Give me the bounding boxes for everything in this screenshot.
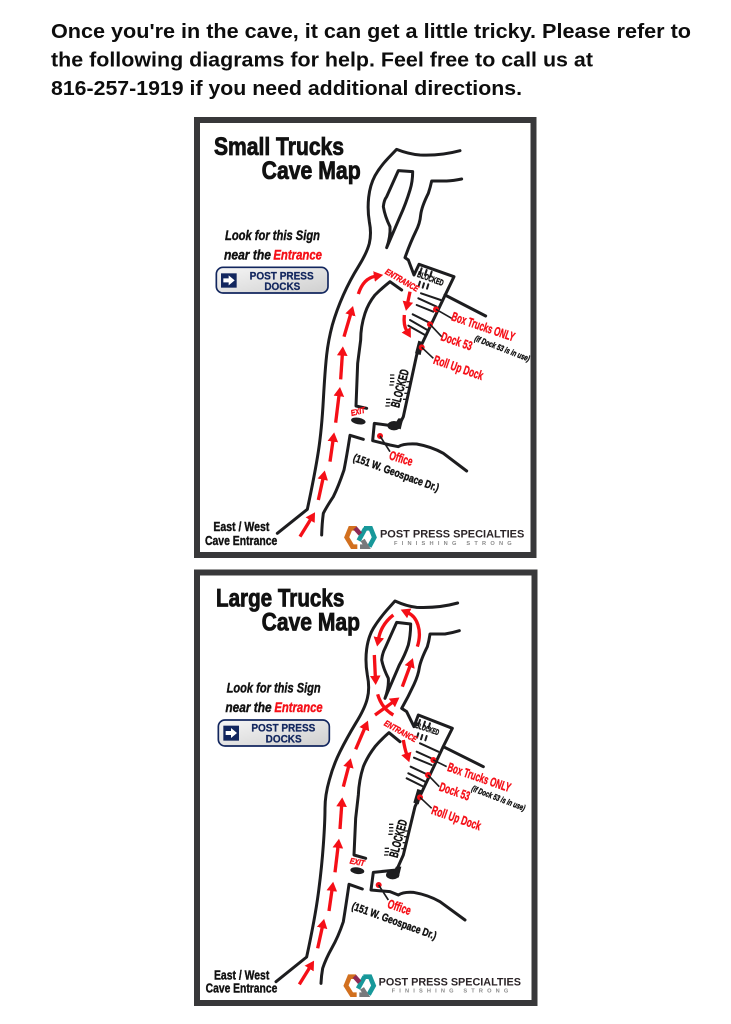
sign instruction: near the bbox=[225, 699, 272, 715]
location markers bbox=[377, 306, 452, 452]
map labels: East / West bbox=[213, 519, 270, 534]
logo: post press specialties: POST PRESS SPECIALTIES bbox=[380, 528, 525, 540]
logo: post press specialties: FINISHING STRONG bbox=[394, 541, 512, 547]
blocked route x stroke bbox=[378, 694, 393, 715]
sign instruction: Entrance bbox=[274, 699, 323, 715]
route arrows bbox=[300, 276, 410, 537]
logo: post press specialties bbox=[346, 976, 521, 995]
sign: post press docks bbox=[216, 267, 328, 293]
map labels: ENTRANCE bbox=[382, 718, 419, 744]
logo: post press specialties bbox=[347, 528, 525, 547]
heading: directions intro bbox=[51, 21, 691, 100]
location markers bbox=[376, 757, 447, 900]
map drawing bbox=[205, 133, 531, 548]
heading: directions intro: the following diagrams for help. Feel free to call us at bbox=[51, 50, 593, 72]
sign: post press docks: POST PRESS bbox=[251, 723, 315, 735]
map labels: BLOCKED bbox=[414, 721, 440, 737]
map title bbox=[216, 585, 360, 637]
map labels: Cave Entrance bbox=[205, 533, 277, 548]
sign: post press docks bbox=[218, 720, 329, 746]
map labels: (if Dock 53 is in use) bbox=[470, 783, 527, 813]
sign: post press docks: DOCKS bbox=[264, 281, 300, 293]
map labels: (if Dock 53 is in use) bbox=[473, 333, 531, 363]
map labels: (151 W. Geospace Dr.) bbox=[351, 452, 441, 495]
sign instruction: Look for this Sign bbox=[225, 227, 320, 243]
map labels: ENTRANCE bbox=[383, 266, 421, 294]
logo: post press specialties: POST PRESS SPECIALTIES bbox=[379, 977, 521, 989]
map title: Small Trucks bbox=[214, 133, 344, 161]
heading: directions intro: Once you're in the cave, it can get a little tricky. Please refer to bbox=[51, 21, 691, 43]
map labels: Roll Up Dock bbox=[432, 353, 486, 383]
map labels: BLOCKED bbox=[416, 269, 445, 288]
map labels: Office bbox=[387, 448, 414, 469]
roll up dock and office blocks bbox=[350, 789, 423, 879]
panel frame bbox=[197, 120, 534, 555]
map labels: BLOCKED bbox=[387, 818, 410, 859]
map labels: Roll Up Dock bbox=[430, 803, 483, 833]
map title: Cave Map bbox=[262, 157, 361, 185]
panel: large trucks cave map bbox=[197, 572, 534, 1003]
sign instruction: Look for this Sign bbox=[227, 679, 321, 695]
route arrows bbox=[299, 613, 419, 984]
map labels: EXIT bbox=[350, 405, 367, 418]
map labels bbox=[206, 718, 527, 996]
sign instruction bbox=[224, 227, 322, 263]
map labels: Box Trucks ONLY bbox=[450, 310, 517, 344]
map labels: Dock 53 bbox=[439, 330, 474, 353]
panel frame bbox=[197, 572, 534, 1003]
roll up dock and office blocks bbox=[351, 341, 423, 430]
map labels bbox=[205, 266, 531, 548]
map labels: Office bbox=[386, 897, 413, 918]
map labels: East / West bbox=[214, 967, 270, 982]
cave walls bbox=[276, 601, 483, 983]
sign instruction bbox=[225, 679, 323, 715]
logo: post press specialties: FINISHING STRONG bbox=[392, 989, 509, 995]
map drawing bbox=[206, 585, 527, 996]
map labels: Box Trucks ONLY bbox=[446, 760, 513, 795]
sign: post press docks: POST PRESS bbox=[250, 270, 314, 282]
map labels: BLOCKED bbox=[388, 368, 412, 409]
panel: small trucks cave map bbox=[197, 120, 534, 555]
map labels: Cave Entrance bbox=[206, 981, 277, 996]
heading: directions intro: 816-257-1919 if you need additional directions. bbox=[51, 78, 522, 100]
sign instruction: Entrance bbox=[273, 247, 322, 263]
map labels: (151 W. Geospace Dr.) bbox=[350, 901, 438, 942]
sign instruction: near the bbox=[224, 247, 271, 263]
map labels: Dock 53 bbox=[437, 780, 472, 803]
map title: Large Trucks bbox=[216, 585, 344, 613]
map title: Cave Map bbox=[262, 609, 360, 637]
map labels: EXIT bbox=[349, 855, 366, 868]
cave walls bbox=[277, 149, 486, 535]
sign: post press docks: DOCKS bbox=[266, 733, 302, 745]
map title bbox=[214, 133, 361, 185]
